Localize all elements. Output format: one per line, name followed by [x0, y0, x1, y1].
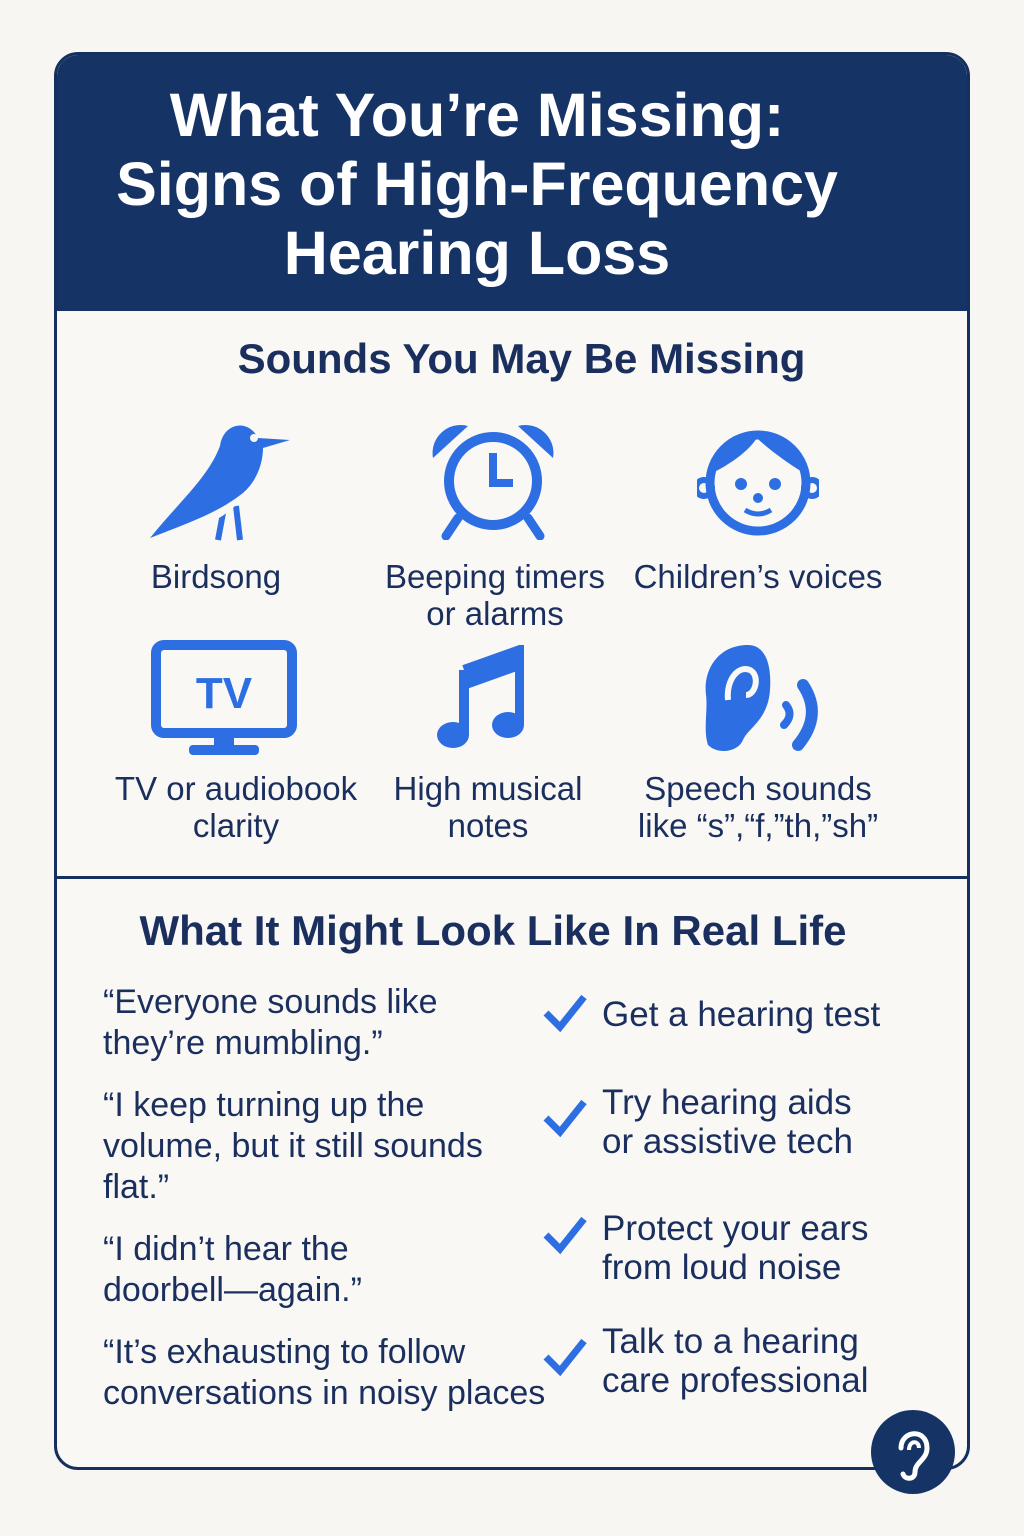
heading: real life: What It Might Look Like In Real Life [139, 907, 846, 954]
quote 2 [103, 1086, 483, 1206]
title: Hearing Loss [284, 219, 670, 287]
label: children: Children’s voices [634, 558, 882, 595]
label: TV: TV or audiobook [115, 770, 357, 807]
action 4: care professional [602, 1361, 869, 1400]
label: speech [638, 770, 878, 844]
title [116, 81, 838, 287]
action 3 [602, 1209, 868, 1287]
label: TV: clarity [193, 807, 279, 844]
icon: TV: TV [196, 669, 253, 718]
icon: ear with sound [706, 645, 818, 751]
label: speech: like “s”,“f,”th,”sh” [638, 807, 878, 844]
title: Signs of High-Frequency [116, 150, 838, 218]
label: birdsong: Birdsong [151, 558, 281, 595]
check 1 [544, 994, 587, 1032]
quote 3: doorbell—again.” [103, 1271, 362, 1309]
icon: alarm clock [432, 425, 554, 540]
icon: child face [697, 430, 819, 536]
label: TV [115, 770, 358, 844]
action 1: Get a hearing test [602, 995, 880, 1034]
check 4 [544, 1338, 587, 1376]
action 2: Try hearing aids [602, 1083, 852, 1122]
action 2 [602, 1083, 853, 1161]
quote 3: “I didn’t hear the [103, 1230, 349, 1268]
label: speech: Speech sounds [644, 770, 872, 807]
title: What You’re Missing: [170, 81, 784, 149]
icon: music note [437, 645, 524, 748]
action 3: Protect your ears [602, 1209, 868, 1248]
quote 1: “Everyone sounds like [103, 983, 438, 1021]
quote 2: “I keep turning up the [103, 1086, 424, 1124]
icon: TV [151, 640, 297, 755]
label: music: notes [448, 807, 528, 844]
action 2: or assistive tech [602, 1122, 853, 1161]
check 3 [544, 1216, 587, 1254]
heading: sounds: Sounds You May Be Missing [238, 335, 805, 382]
check 2 [544, 1100, 587, 1138]
quote 2: volume, but it still sounds [103, 1127, 483, 1165]
icon: bird [150, 426, 290, 540]
quote 1: they’re mumbling.” [103, 1024, 383, 1062]
quote 2: flat.” [103, 1168, 169, 1206]
icon: ear badge [871, 1410, 955, 1494]
quote 4 [103, 1333, 545, 1412]
label: beeping timers [385, 558, 605, 632]
quote 1 [103, 983, 438, 1062]
header banner [57, 55, 967, 311]
label: beeping timers: or alarms [426, 595, 564, 632]
action 4 [602, 1322, 869, 1400]
action 3: from loud noise [602, 1248, 841, 1287]
label: music [394, 770, 582, 844]
quote 4: conversations in noisy places [103, 1374, 545, 1412]
label: beeping timers: Beeping timers [385, 558, 605, 595]
quote 3 [103, 1230, 362, 1309]
label: music: High musical [394, 770, 582, 807]
quote 4: “It’s exhausting to follow [103, 1333, 465, 1371]
action 4: Talk to a hearing [602, 1322, 859, 1361]
